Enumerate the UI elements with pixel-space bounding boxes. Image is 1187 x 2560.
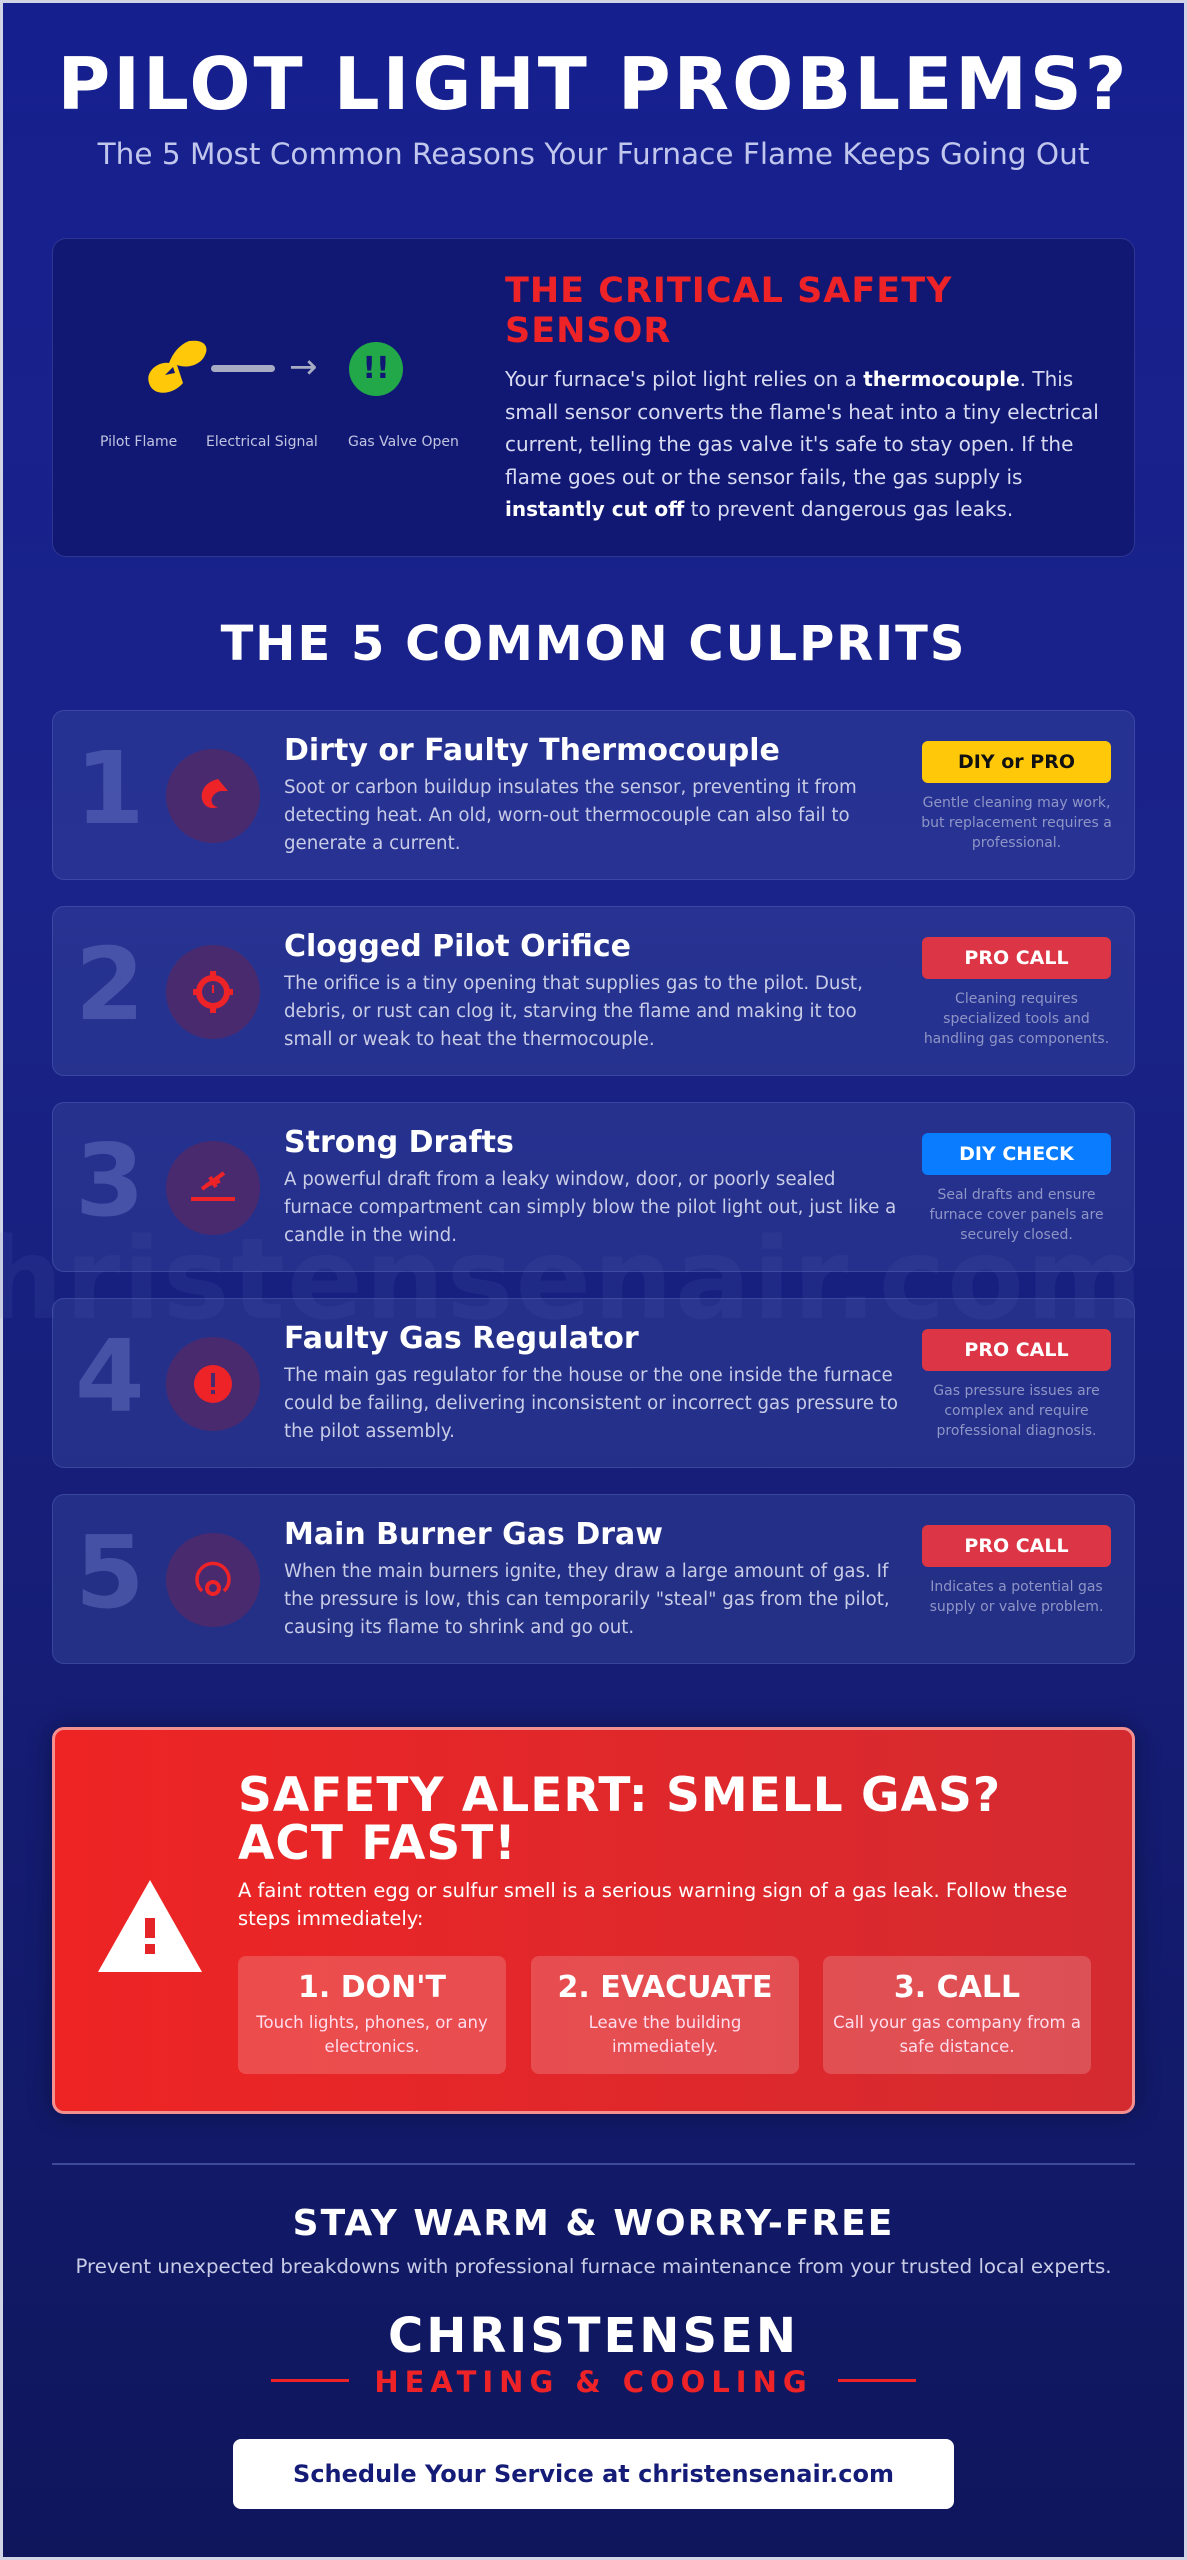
step 3 [823, 1956, 1091, 2074]
icon: orifice [166, 945, 260, 1039]
card 3: 3 [75, 1122, 145, 1239]
step 2: Leave the building immediately. [589, 2013, 741, 2056]
footer heading: STAY WARM & WORRY-FREE [293, 2203, 894, 2244]
card 1: Dirty or Faulty Thermocouple [284, 733, 780, 768]
card 2: Cleaning requires specialized tools and handling gas components. [924, 991, 1109, 1047]
card 1: 1 [75, 730, 145, 847]
step 1: Touch lights, phones, or any electronics. [256, 2013, 488, 2056]
card 4: PRO CALL [964, 1339, 1069, 1361]
safety alert panel [52, 1727, 1135, 2114]
card 1 [52, 710, 1135, 880]
card 1: DIY or PRO [958, 751, 1075, 773]
step 3: Call your gas company from a safe distance. [833, 2013, 1081, 2056]
card 3: DIY CHECK [959, 1143, 1074, 1165]
card 4: 4 [75, 1318, 145, 1435]
card 2 [52, 906, 1135, 1076]
step 3: 3. CALL [894, 1970, 1020, 2005]
icon: gas valve open [349, 342, 403, 396]
step 2 [531, 1956, 799, 2074]
title: PILOT LIGHT PROBLEMS? [57, 42, 1130, 126]
step 1 [238, 1956, 506, 2074]
logo: HEATING & COOLING [374, 2365, 813, 2399]
subtitle: The 5 Most Common Reasons Your Furnace Flame Keeps Going Out [98, 137, 1089, 171]
labels: Pilot Flame [100, 434, 177, 450]
card 5: Main Burner Gas Draw [284, 1517, 663, 1552]
card 5 [52, 1494, 1135, 1664]
logo [271, 2308, 916, 2399]
card 5: When the main burners ignite, they draw a large amount of gas. If the pressure is low, this can temporarily "steal" gas from the pilot, causing its flame to shrink and go out. [284, 1561, 890, 1638]
panel: critical safety sensor [52, 238, 1135, 557]
step 2: 2. EVACUATE [558, 1970, 772, 2005]
alert text: A faint rotten egg or sulfur smell is a serious warning sign of a gas leak. Follow these steps immediately: [238, 1879, 1067, 1930]
card 3: Strong Drafts [284, 1125, 514, 1160]
card 5: 5 [75, 1514, 145, 1631]
card 2: PRO CALL [964, 947, 1069, 969]
card 3 [52, 1102, 1135, 1272]
card 2: Clogged Pilot Orifice [284, 929, 631, 964]
card 1: Gentle cleaning may work, but replacement requires a professional. [921, 795, 1112, 851]
diagram: flame to valve: Electrical Signal [206, 434, 318, 450]
diagram: flame to valve: Gas Valve Open [348, 434, 459, 450]
alert title: SAFETY ALERT: SMELL GAS? ACT FAST! [238, 1768, 1001, 1871]
card 2: The orifice is a tiny opening that supplies gas to the pilot. Dust, debris, or rust can clog it, starving the flame and making it too small or weak to heat the thermocouple. [284, 973, 863, 1050]
card 4 [52, 1298, 1135, 1468]
body text: Your furnace's pilot light relies on a thermocouple. This small sensor converts the flame's heat into a tiny electrical current, telling the gas valve it's safe to stay open. If the flame goes out or the sensor fails, the gas supply is instantly cut off to prevent dangerous gas leaks. [505, 367, 1099, 521]
arrow: → [289, 347, 318, 387]
icon: alert [166, 1337, 260, 1431]
icon: warning triangle [98, 1880, 202, 1972]
icon: pilot flame [148, 340, 206, 393]
signal bar [211, 365, 275, 372]
icon: wind [166, 1141, 260, 1235]
icon: flame [166, 749, 260, 843]
CTA button: Schedule Your Service at christensenair.com [293, 2460, 894, 2488]
diagram: flame to valve [100, 340, 459, 450]
logo: CHRISTENSEN [388, 2308, 799, 2364]
card 4: The main gas regulator for the house or the one inside the furnace could be failing, delivering inconsistent or incorrect gas pressure to the pilot assembly. [284, 1365, 898, 1442]
icon: burner [166, 1533, 260, 1627]
card 4: Faulty Gas Regulator [284, 1321, 639, 1356]
step 1: 1. DON'T [298, 1970, 446, 2005]
card 3: Seal drafts and ensure furnace cover panels are securely closed. [929, 1187, 1104, 1243]
card 5: PRO CALL [964, 1535, 1069, 1557]
card 1: Soot or carbon buildup insulates the sensor, preventing it from detecting heat. An old, worn-out thermocouple can also fail to generate a current. [284, 777, 857, 854]
icon: gas valve open: !! [362, 351, 390, 386]
footer text: Prevent unexpected breakdowns with professional furnace maintenance from your trusted local experts. [75, 2255, 1112, 2278]
heading: 5 culprits: THE 5 COMMON CULPRITS [221, 616, 966, 672]
card 3: A powerful draft from a leaky window, door, or poorly sealed furnace compartment can simply blow the pilot light out, just like a candle in the wind. [284, 1169, 896, 1246]
card 4: Gas pressure issues are complex and require professional diagnosis. [933, 1383, 1100, 1439]
heading: THE CRITICAL SAFETY SENSOR [505, 271, 952, 351]
card 5: Indicates a potential gas supply or valve problem. [930, 1579, 1103, 1615]
card 2: 2 [75, 926, 145, 1043]
CTA button [233, 2439, 954, 2509]
